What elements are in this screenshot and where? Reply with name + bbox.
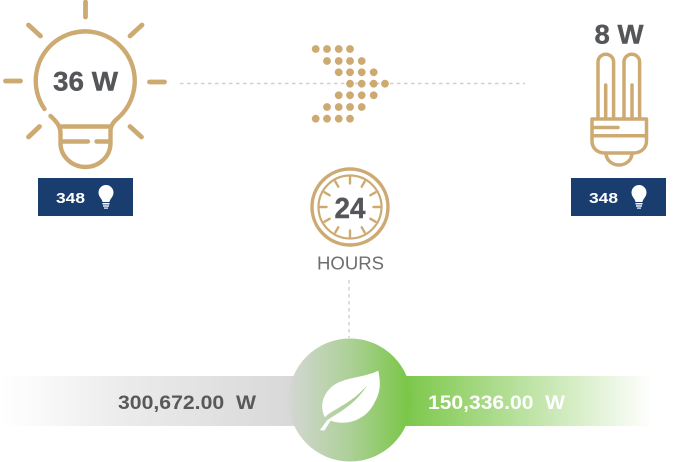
bar: right total: 150,336.00 W — [428, 392, 566, 414]
badge: left count 348: 348 — [56, 190, 85, 207]
bulb base lines — [60, 126, 110, 142]
bar: left total: 300,672.00 W — [118, 392, 257, 414]
label: 24: 24 — [334, 193, 366, 225]
icon: small bulb — [98, 185, 114, 209]
icon: CFL bulb — [592, 54, 646, 165]
dotted vertical connector — [348, 280, 350, 338]
badge: right count 348 — [571, 178, 666, 216]
badge: right count 348: 348 — [589, 190, 618, 207]
label: 8 W: 8 W — [594, 20, 644, 50]
badge: left count 348 — [38, 178, 133, 216]
bulb outline — [36, 31, 135, 167]
icon: leaf — [320, 371, 380, 431]
icon: clock — [312, 169, 388, 245]
label: HOURS: HOURS — [317, 254, 384, 274]
icon: incandescent bulb 36 W — [6, 2, 164, 167]
bar: left total — [0, 376, 295, 426]
light rays — [6, 2, 164, 137]
dotted connector line — [180, 82, 525, 84]
label: 36 W: 36 W — [53, 66, 119, 96]
icon: arrow of dots — [312, 45, 389, 123]
bar: right total — [405, 376, 652, 426]
green circle with leaf — [288, 338, 412, 462]
icon: small bulb — [632, 185, 646, 209]
